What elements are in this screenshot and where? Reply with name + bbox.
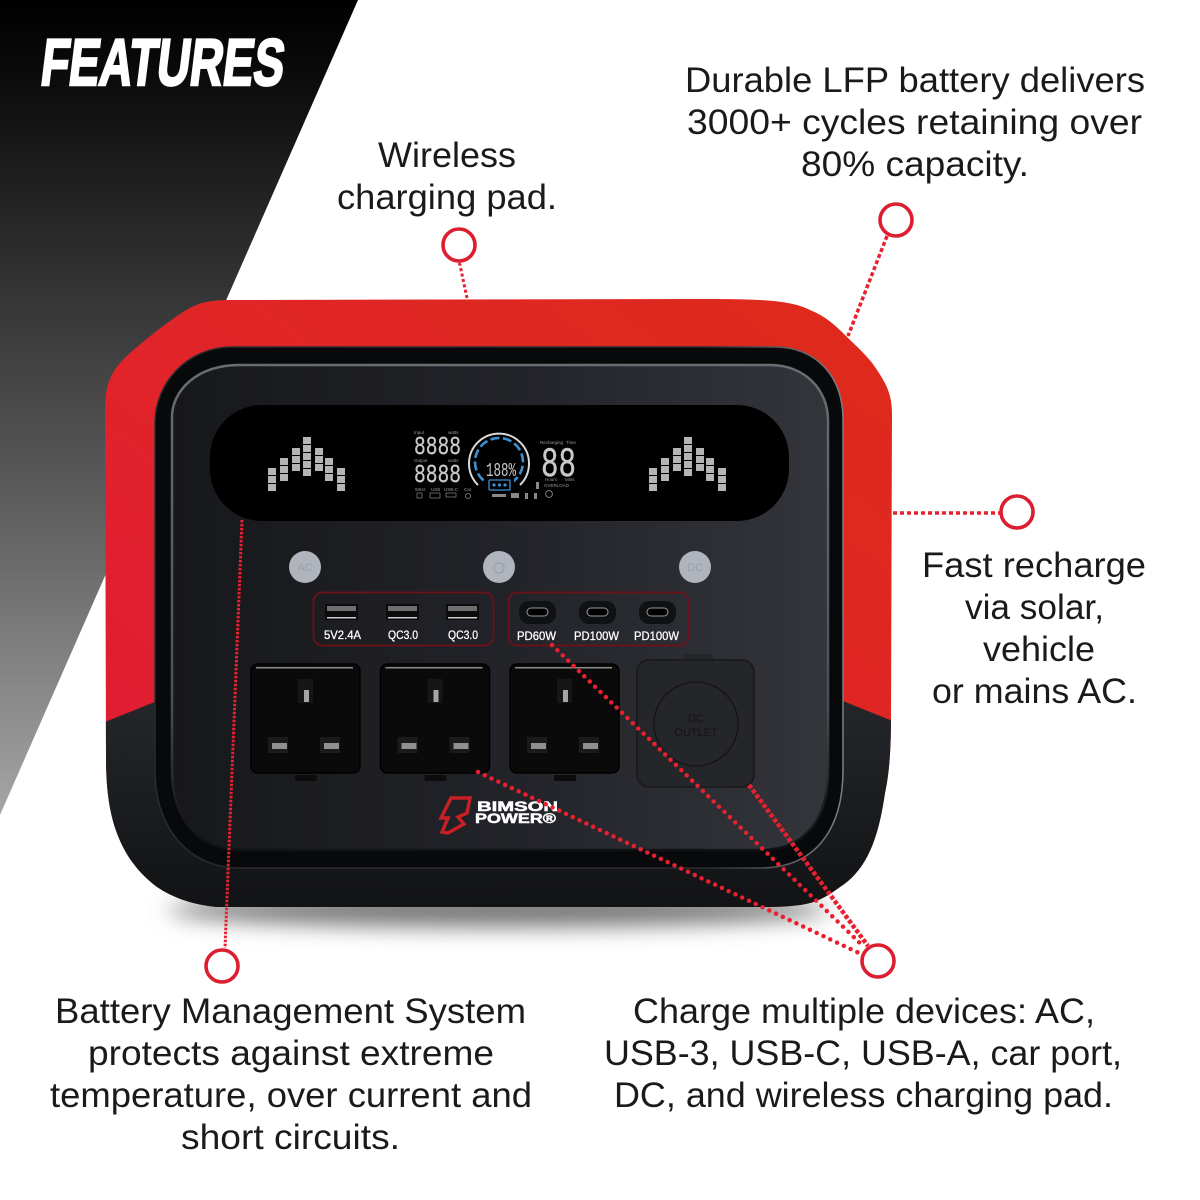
LCD readout: 88 (541, 441, 576, 489)
DC outlet cover (637, 654, 754, 787)
USB-C port group (508, 592, 688, 646)
USB-C port group: PD100W (634, 631, 679, 643)
text: fast recharge (922, 546, 1146, 711)
LCD readout: watts (448, 430, 459, 435)
LCD readout: Input (414, 430, 425, 435)
USB-A port group: QC3.0 (388, 630, 418, 642)
text: durable LFP battery (685, 61, 1145, 184)
AC socket 2 (380, 664, 490, 781)
marker: multiple devices (862, 945, 894, 977)
text: battery management system: short circuits. (181, 1118, 400, 1157)
LCD readout: USB-C (444, 487, 459, 492)
left level indicator (268, 437, 345, 491)
text: charge multiple devices: Charge multiple devices: AC, (633, 992, 1095, 1031)
USB-A port group: QC3.0 (448, 630, 478, 642)
LCD readout: 50Hz (415, 487, 426, 492)
text: durable LFP battery: 80% capacity. (801, 145, 1029, 184)
callout connector: battery management (225, 520, 242, 948)
LCD readout: OVERLOAD (544, 483, 570, 488)
text: battery management system (50, 992, 532, 1157)
callout connector: wireless pad (459, 263, 467, 298)
LCD readout: Recharging (540, 440, 564, 445)
text: wireless charging pad (337, 136, 557, 217)
text: battery management system: temperature, over current and (50, 1076, 532, 1115)
marker: wireless pad (443, 229, 475, 261)
text: wireless charging pad: Wireless (378, 136, 516, 175)
LCD readout: USB (431, 487, 440, 492)
callout connector: fast recharge (893, 511, 1000, 515)
ground shadow (168, 893, 828, 927)
title: FEATURES: FEATURES (37, 26, 289, 100)
power station product (100, 295, 900, 927)
text: durable LFP battery: Durable LFP battery delivers (685, 61, 1145, 100)
LCD readout (414, 430, 576, 499)
USB-A port group: 5V2.4A (324, 630, 361, 642)
LCD readout: Mins (565, 477, 575, 482)
text: fast recharge: via solar, (965, 588, 1104, 627)
USB-C port group: PD60W (517, 631, 556, 643)
corner background: gradient triangle (0, 0, 358, 815)
text: battery management system: protects against extreme (88, 1034, 494, 1073)
button: DC (679, 551, 711, 583)
LCD readout: 8888 (414, 432, 461, 462)
text: wireless charging pad: charging pad. (337, 178, 557, 217)
AC socket 1 (251, 664, 360, 781)
front panel (172, 365, 828, 850)
front bezel (155, 347, 843, 868)
USB-C port group: PD100W (574, 631, 619, 643)
LCD readout: Car (464, 487, 472, 492)
AC socket 3 (510, 664, 619, 781)
text: fast recharge: Fast recharge (922, 546, 1146, 585)
DC outlet cover: DC (688, 713, 704, 725)
body shell (100, 295, 900, 915)
USB-A port group (314, 592, 494, 646)
button: AC: AC (297, 562, 313, 574)
text: charge multiple devices: DC, and wireless charging pad. (614, 1076, 1113, 1115)
LCD readout: 188% (486, 460, 516, 482)
marker: LFP battery (880, 204, 912, 236)
LCD readout: Output (414, 458, 428, 463)
DC outlet cover: OUTLET (674, 727, 718, 739)
text: charge multiple devices: USB-3, USB-C, USB-A, car port, (604, 1034, 1122, 1073)
display window (210, 405, 789, 521)
callout connectors: multiple devices (478, 645, 868, 954)
text: battery management system: Battery Management System (55, 992, 526, 1031)
LCD readout: Time (566, 440, 576, 445)
text: fast recharge: or mains AC. (932, 672, 1137, 711)
LCD readout: 8888 (414, 460, 461, 490)
marker: fast recharge (1001, 496, 1033, 528)
LCD readout: watts (448, 458, 459, 463)
text: fast recharge: vehicle (983, 630, 1095, 669)
text: charge multiple devices (604, 992, 1122, 1115)
brand logo: POWER® (475, 811, 556, 826)
button: AC (289, 551, 321, 583)
marker: battery management (206, 950, 238, 982)
callout connector: LFP battery (848, 236, 887, 336)
right level indicator (649, 437, 726, 491)
brand logo (441, 798, 558, 833)
text: durable LFP battery: 3000+ cycles retaining over (687, 103, 1142, 142)
button: power (483, 551, 515, 583)
LCD readout: Hours (545, 477, 558, 482)
brand logo: BIMSON (477, 799, 558, 814)
button: DC: DC (687, 562, 703, 574)
